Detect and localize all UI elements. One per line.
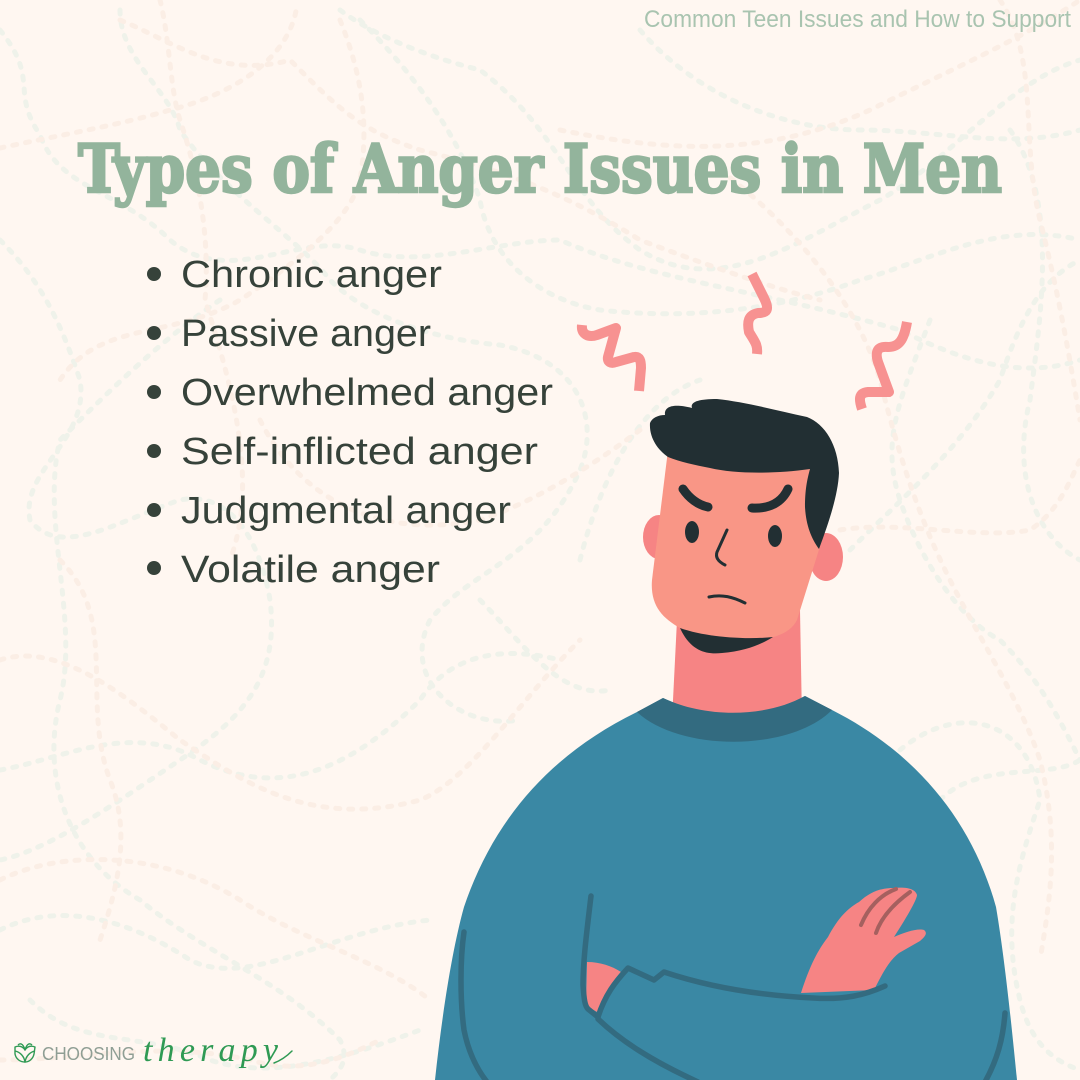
logo wordmark: therapy: therapy <box>143 1032 279 1069</box>
list item: volatile anger: Volatile anger <box>181 549 440 591</box>
list item: self-inflicted anger: Self-inflicted anger <box>181 431 538 473</box>
eyes <box>685 521 782 547</box>
nose and mouth <box>709 530 745 603</box>
sweater body <box>435 696 1017 1080</box>
icon: anger squiggles <box>582 274 907 409</box>
ears <box>643 515 843 581</box>
hair <box>650 399 839 549</box>
logo flourish <box>274 1051 292 1063</box>
neck <box>672 610 802 720</box>
title: Types of Anger Issues in Men <box>78 130 1002 208</box>
sweater collar <box>637 696 832 742</box>
illustration: angry man with crossed arms <box>435 274 1017 1080</box>
list item: judgmental anger: Judgmental anger <box>181 490 511 532</box>
bullet list: types of anger <box>147 254 553 591</box>
list item: chronic anger: Chronic anger <box>181 254 442 296</box>
logo: Choosing Therapy <box>15 1032 292 1069</box>
left hand under arm <box>586 962 621 1013</box>
list item: passive anger: Passive anger <box>181 313 431 355</box>
eyebrows <box>683 489 788 508</box>
list item: overwhelmed anger: Overwhelmed anger <box>181 372 553 414</box>
face <box>652 450 822 638</box>
logo wordmark: choosing: CHOOSING <box>42 1044 135 1064</box>
knuckle lines <box>861 889 910 933</box>
sweater fold lines <box>461 896 1005 1080</box>
right hand on arm <box>801 888 926 993</box>
icon: lotus leaf <box>15 1044 35 1062</box>
beard <box>680 628 773 653</box>
